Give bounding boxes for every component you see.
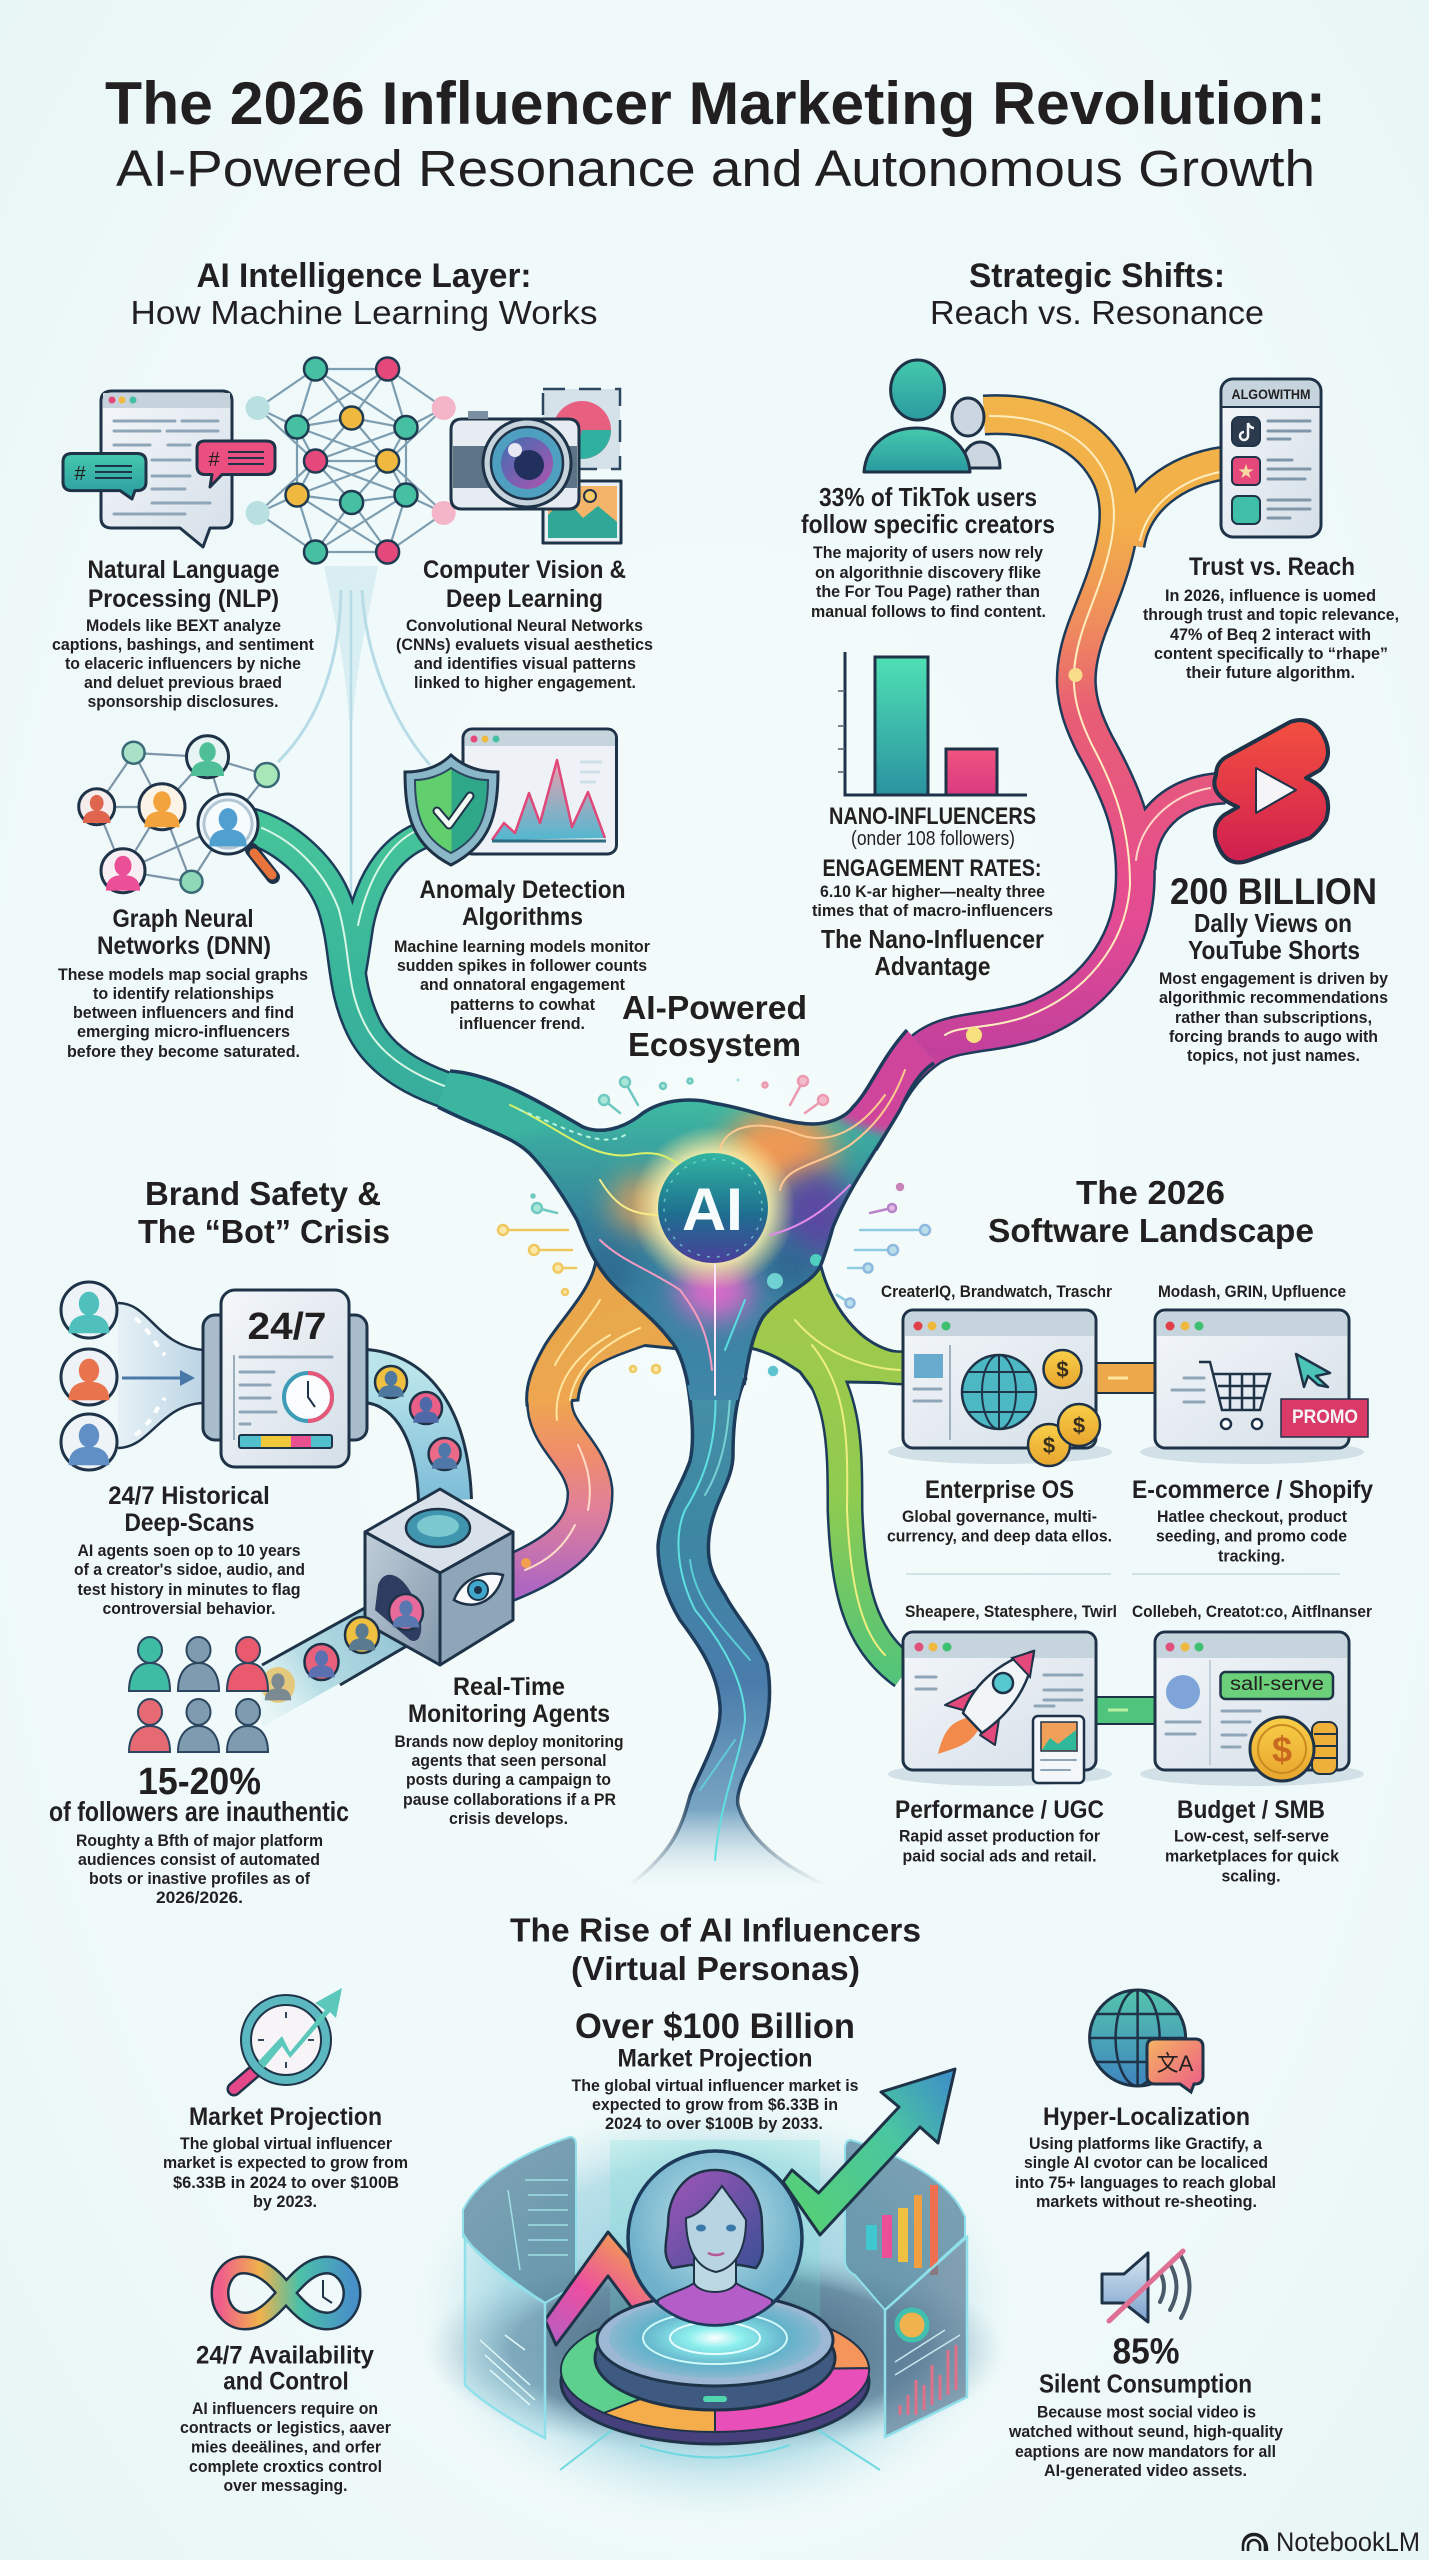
- text block: hyper-localization: [1015, 2103, 1276, 2211]
- tools list row 2: Sheapere, Statesphere, Twirl: [905, 1603, 1117, 1621]
- icon: algorithm phone: ★: [1238, 464, 1254, 481]
- text block: trust vs reach: [1143, 553, 1399, 682]
- heading: [138, 1175, 390, 1250]
- text block: youtube shorts: 200 BILLION: [1170, 871, 1377, 912]
- arrow: rising left: [545, 2232, 690, 2352]
- holographic side panels: [465, 2237, 545, 2438]
- tools list row 1: Modash, GRIN, Upfluence: [1158, 1283, 1346, 1301]
- text block: inauthentic followers: of followers are inauthentic: [49, 1796, 349, 1827]
- text block: nano-influencer: NANO-INFLUENCERS: [829, 803, 1036, 830]
- heading: [510, 1912, 921, 1987]
- text block: performance and budget: marketplaces for quick: [1165, 1846, 1340, 1866]
- arrow: streams into scanner: [118, 1303, 203, 1448]
- branch: strategic shifts tube: [860, 415, 1225, 1140]
- hologram illustration: [415, 2069, 1015, 2525]
- icon: inspection cube: [365, 1489, 513, 1665]
- virtual persona: [628, 2151, 802, 2330]
- text block: GNN: emerging micro-influencers: [77, 1022, 290, 1041]
- text block: trust vs reach: their future algorithm.: [1186, 663, 1355, 682]
- text block: GNN: before they become saturated.: [67, 1042, 300, 1061]
- text block: performance and budget: scaling.: [1222, 1866, 1280, 1886]
- text block: market projection: $6.33B in 2024 to over $100B: [173, 2173, 399, 2192]
- text block: GNN: Networks (DNN): [97, 932, 271, 960]
- icon: 24/7 scanner card: 24/7: [248, 1306, 326, 1348]
- text block: anomaly detection: and onnatoral engagement: [420, 975, 625, 994]
- text block: market projection headline: [572, 2007, 858, 2133]
- connector: orange: [1096, 1363, 1155, 1393]
- title: [105, 70, 1326, 197]
- heading: Strategic Shifts:: [969, 257, 1225, 295]
- text block: inauthentic followers: 2026/2026.: [156, 1888, 243, 1907]
- text block: market projection headline: The global virtual influencer market is: [572, 2076, 858, 2095]
- window: e-commerce: PROMO: [1292, 1407, 1358, 1428]
- text block: real-time monitoring: Real-Time: [453, 1673, 565, 1701]
- text block: real-time monitoring: posts during a campaign to: [406, 1770, 611, 1789]
- text block: real-time monitoring: pause collaborations if a PR: [403, 1790, 616, 1809]
- text block: inauthentic followers: [49, 1761, 349, 1907]
- text block: hyper-localization: single AI cvotor can be localiced: [1024, 2153, 1268, 2172]
- tools list row 2: [905, 1603, 1373, 1621]
- text block: nano-influencer: Advantage: [874, 951, 990, 981]
- text block: real-time monitoring: [394, 1673, 624, 1828]
- icon: shield and anomaly chart: [405, 729, 616, 865]
- text block: market projection headline: Over $100 Billion: [575, 2007, 855, 2046]
- text block: youtube shorts: [1159, 871, 1388, 1065]
- icon: audience crowd: [129, 1637, 268, 1752]
- text block: NLP: to elaceric influencers by niche: [65, 654, 301, 673]
- icon: infinity clock: [220, 2265, 352, 2321]
- text block: TikTok stat: follow specific creators: [801, 509, 1055, 539]
- text block: TikTok stat: manual follows to find content.: [811, 602, 1046, 621]
- heading: Reach vs. Resonance: [930, 294, 1264, 331]
- window: e-commerce: [1140, 1310, 1368, 1464]
- text block: availability: [180, 2342, 391, 2495]
- text block: silent consumption: [1008, 2330, 1284, 2480]
- AI badge: [658, 1153, 768, 1263]
- text block: anomaly detection: Algorithms: [462, 903, 583, 931]
- heading: AI-powered ecosystem: AI-Powered: [622, 989, 807, 1026]
- tools list row 1: CreaterIQ, Brandwatch, Traschr: [881, 1283, 1113, 1301]
- text block: youtube shorts: algorithmic recommendations: [1159, 988, 1388, 1007]
- heading: (Virtual Personas): [571, 1950, 860, 1987]
- AI badge: AI: [682, 1176, 743, 1243]
- heading: Brand Safety &: [145, 1175, 381, 1212]
- chart: nano-influencer bars: [838, 652, 1027, 795]
- text block: inauthentic followers: bots or inastive profiles as of: [89, 1869, 310, 1888]
- text block: GNN: [58, 905, 308, 1061]
- text block: silent consumption: 85%: [1112, 2330, 1180, 2372]
- text block: availability: AI influencers require on: [192, 2399, 378, 2418]
- text block: market projection: [163, 2103, 408, 2211]
- text block: anomaly detection: Machine learning models monitor: [394, 937, 650, 956]
- text block: performance and budget: [895, 1796, 1340, 1886]
- text block: availability: contracts or legistics, aaver: [180, 2418, 391, 2437]
- text block: TikTok stat: on algorithnie discovery flike: [815, 563, 1041, 582]
- icon: faces on belt: [261, 1594, 423, 1703]
- decorative nodes around hub: [498, 1076, 930, 1375]
- window: budget SMB: sall-serve: [1230, 1674, 1324, 1695]
- icon: algorithm phone: ALGOWITHM: [1232, 386, 1310, 402]
- text block: market projection: Market Projection: [189, 2103, 382, 2131]
- branch: AI intelligence layer tube: [250, 826, 500, 1105]
- window: enterprise OS: [888, 1310, 1112, 1466]
- central tail: [630, 1380, 825, 1885]
- window: enterprise OS: $: [1043, 1433, 1055, 1458]
- text block: inauthentic followers: Roughty a Bfth of major platform: [76, 1831, 323, 1850]
- text block: computer vision: and identifies visual patterns: [414, 654, 636, 673]
- text block: youtube shorts: YouTube Shorts: [1188, 935, 1360, 965]
- text block: computer vision: (CNNs) evaluets visual aesthetics: [396, 635, 653, 654]
- heading: [130, 257, 598, 331]
- text block: market projection headline: Market Projection: [618, 2044, 812, 2072]
- text block: enterprise and e-commerce: currency, and deep data ellos.: [887, 1526, 1112, 1546]
- branch: software landscape tube: [750, 1262, 905, 1672]
- text block: silent consumption: eaptions are now mandators for all: [1015, 2442, 1276, 2461]
- text block: anomaly detection: Anomaly Detection: [420, 876, 626, 904]
- text block: performance and budget: paid social ads and retail.: [902, 1846, 1096, 1866]
- heading: [930, 257, 1264, 331]
- tools list row 2: Collebeh, Creatot:co, Aitflnanser: [1132, 1603, 1373, 1621]
- text block: silent consumption: AI-generated video assets.: [1044, 2461, 1247, 2480]
- icon: youtube shorts: [1214, 720, 1328, 862]
- text block: nano-influencer: (onder 108 followers): [851, 828, 1015, 850]
- icon: followers: [864, 360, 1000, 472]
- icon: algorithm phone: [1221, 379, 1321, 537]
- heading: AI-powered ecosystem: [622, 989, 807, 1063]
- text block: TikTok stat: [801, 482, 1055, 621]
- text block: youtube shorts: Most engagement is driven by: [1159, 969, 1388, 988]
- panel: brand safety: [49, 1175, 624, 1907]
- text block: inauthentic followers: 15-20%: [138, 1761, 261, 1803]
- heading: The Rise of AI Influencers: [510, 1912, 921, 1948]
- text block: youtube shorts: rather than subscriptions,: [1175, 1008, 1372, 1027]
- text block: computer vision: Convolutional Neural Networks: [406, 616, 643, 635]
- text block: hyper-localization: Hyper-Localization: [1043, 2103, 1250, 2131]
- icon: document with hashtag bubbles: #: [208, 449, 220, 471]
- text block: trust vs reach: Trust vs. Reach: [1189, 553, 1355, 581]
- window: budget SMB: $: [1272, 1729, 1292, 1770]
- heading: [988, 1174, 1314, 1249]
- text block: deep-scans: [74, 1482, 305, 1618]
- text block: market projection: by 2023.: [253, 2192, 317, 2211]
- arrow: rising right: [783, 2069, 955, 2235]
- window: budget SMB: [1140, 1632, 1364, 1786]
- text block: NLP: [52, 556, 314, 711]
- text block: performance and budget: Low-cest, self-serve: [1174, 1826, 1329, 1846]
- text block: computer vision: linked to higher engagement.: [414, 673, 636, 692]
- icon: document with hashtag bubbles: [63, 391, 275, 547]
- text block: deep-scans: test history in minutes to flag: [78, 1580, 300, 1599]
- platform: [561, 2294, 869, 2444]
- text block: availability: complete croxtics control: [189, 2457, 382, 2476]
- text block: trust vs reach: 47% of Beq 2 interact with: [1170, 625, 1371, 644]
- text block: silent consumption: Silent Consumption: [1039, 2368, 1252, 2398]
- text block: enterprise and e-commerce: [887, 1476, 1373, 1566]
- icon: document with hashtag bubbles: #: [74, 463, 86, 485]
- icon: globe translation: [1090, 1990, 1203, 2092]
- text block: deep-scans: controversial behavior.: [102, 1599, 276, 1618]
- heading: The “Bot” Crisis: [138, 1213, 390, 1250]
- arrow: belt to cube: [366, 1366, 461, 1500]
- text block: enterprise and e-commerce: seeding, and promo code: [1156, 1526, 1347, 1546]
- panel: strategic shifts: [801, 257, 1399, 1065]
- text block: NLP: captions, bashings, and sentiment: [52, 635, 314, 654]
- text block: TikTok stat: The majority of users now rely: [813, 543, 1044, 562]
- text block: youtube shorts: forcing brands to augo with: [1169, 1027, 1378, 1046]
- text block: GNN: Graph Neural: [112, 905, 254, 933]
- text block: enterprise and e-commerce: tracking.: [1218, 1546, 1285, 1566]
- text block: deep-scans: of a creator's sidoe, audio, and: [74, 1560, 305, 1579]
- text block: GNN: These models map social graphs: [58, 965, 308, 984]
- light beam from neural network: [278, 566, 430, 925]
- text block: market projection headline: 2024 to over $100B by 2033.: [605, 2114, 823, 2133]
- window: enterprise OS: $: [1056, 1357, 1069, 1382]
- text block: silent consumption: watched without seund, high-quality: [1008, 2422, 1284, 2441]
- icon: market projection magnifier: [234, 1988, 342, 2089]
- text block: availability: and Control: [223, 2368, 349, 2396]
- title: AI-Powered Resonance and Autonomous Growth: [116, 140, 1315, 197]
- tools list row 1: [881, 1283, 1346, 1301]
- text block: trust vs reach: In 2026, influence is uomed: [1165, 586, 1376, 605]
- text block: NLP: Models like BEXT analyze: [86, 616, 281, 635]
- text block: nano-influencer: ENGAGEMENT RATES:: [822, 855, 1042, 882]
- text block: computer vision: Computer Vision &: [423, 556, 626, 584]
- text block: anomaly detection: patterns to cowhat: [450, 995, 595, 1014]
- text block: enterprise and e-commerce: Enterprise OS: [925, 1476, 1074, 1504]
- heading: The 2026: [1076, 1174, 1225, 1211]
- logo: NotebookLM: NotebookLM: [1276, 2527, 1420, 2557]
- text block: enterprise and e-commerce: E-commerce / Shopify: [1132, 1476, 1373, 1504]
- branch: brand safety tube: [505, 1260, 690, 1580]
- icon: camera: [451, 389, 621, 543]
- text block: NLP: and deluet previous braed: [84, 673, 282, 692]
- connector: green: [1096, 1697, 1155, 1724]
- text block: real-time monitoring: Brands now deploy monitoring: [394, 1732, 624, 1751]
- text block: youtube shorts: Dally Views on: [1194, 908, 1352, 938]
- panel: AI intelligence layer: [52, 257, 653, 1061]
- icon: muted speaker: [1102, 2251, 1190, 2322]
- heading: AI Intelligence Layer:: [196, 257, 532, 295]
- text block: computer vision: [396, 556, 653, 692]
- icon: globe translation: 文A: [1157, 2051, 1194, 2076]
- text block: nano-influencer: [812, 803, 1053, 981]
- text block: real-time monitoring: Monitoring Agents: [408, 1700, 610, 1728]
- heading: AI-powered ecosystem: Ecosystem: [628, 1026, 801, 1063]
- title: The 2026 Influencer Marketing Revolution:: [105, 70, 1326, 137]
- text block: inauthentic followers: audiences consist of automated: [78, 1850, 320, 1869]
- text block: enterprise and e-commerce: Hatlee checkout, product: [1157, 1507, 1347, 1526]
- text block: nano-influencer: The Nano-Influencer: [821, 924, 1044, 954]
- text block: trust vs reach: through trust and topic relevance,: [1143, 605, 1399, 624]
- text block: performance and budget: Rapid asset production for: [899, 1826, 1100, 1846]
- AI hub: [437, 1028, 935, 1400]
- panel: rise of AI influencers: [163, 1912, 1284, 2525]
- text block: nano-influencer: 6.10 K-ar higher—nealty three: [820, 882, 1045, 901]
- text block: deep-scans: 24/7 Historical: [108, 1482, 270, 1510]
- text block: anomaly detection: [394, 876, 650, 1033]
- text block: nano-influencer: times that of macro-influencers: [812, 901, 1053, 920]
- text block: TikTok stat: the For Tou Page) rather than: [816, 582, 1040, 601]
- text block: market projection: market is expected to grow from: [163, 2153, 408, 2172]
- text block: trust vs reach: content specifically to “rhape”: [1154, 644, 1388, 663]
- text block: computer vision: Deep Learning: [446, 585, 603, 613]
- text block: real-time monitoring: agents that seen personal: [412, 1751, 606, 1770]
- text block: hyper-localization: into 75+ languages to reach global: [1015, 2173, 1276, 2192]
- heading: How Machine Learning Works: [130, 294, 598, 331]
- text block: performance and budget: Budget / SMB: [1177, 1796, 1325, 1824]
- icon: neural network: [246, 358, 456, 564]
- text block: anomaly detection: influencer frend.: [459, 1014, 585, 1033]
- icon: audience portraits: [61, 1282, 117, 1470]
- text block: availability: mies deeälines, and orfer: [191, 2438, 381, 2456]
- text block: silent consumption: Because most social video is: [1037, 2402, 1256, 2422]
- text block: hyper-localization: markets without re-sheoting.: [1036, 2192, 1257, 2211]
- text block: enterprise and e-commerce: Global governance, multi-: [902, 1507, 1097, 1526]
- text block: NLP: sponsorship disclosures.: [88, 692, 278, 711]
- text block: availability: over messaging.: [224, 2476, 348, 2495]
- text block: TikTok stat: 33% of TikTok users: [819, 482, 1037, 512]
- text block: GNN: between influencers and find: [73, 1003, 294, 1022]
- text block: youtube shorts: topics, not just names.: [1187, 1046, 1360, 1065]
- text block: availability: 24/7 Availability: [196, 2342, 374, 2370]
- panel: software landscape: [881, 1174, 1373, 1886]
- text block: real-time monitoring: crisis develops.: [449, 1809, 568, 1828]
- text block: deep-scans: Deep-Scans: [124, 1509, 254, 1537]
- text block: NLP: Processing (NLP): [88, 585, 279, 613]
- text block: market projection headline: expected to grow from $6.33B in: [592, 2095, 838, 2114]
- heading: Software Landscape: [988, 1212, 1314, 1249]
- icon: 24/7 scanner card: [203, 1290, 367, 1467]
- text block: hyper-localization: Using platforms like Gractify, a: [1029, 2134, 1263, 2153]
- arrow: belt from cube to crowd: [260, 1583, 429, 1727]
- text block: performance and budget: Performance / UGC: [895, 1796, 1104, 1824]
- window: enterprise OS: $: [1073, 1413, 1085, 1438]
- text block: GNN: to identify relationships: [93, 984, 274, 1003]
- text block: anomaly detection: sudden spikes in follower counts: [397, 956, 647, 975]
- text block: NLP: Natural Language: [88, 556, 280, 584]
- window: performance UGC: [888, 1632, 1112, 1786]
- text block: market projection: The global virtual influencer: [180, 2134, 392, 2153]
- icon: graph neural network: [79, 736, 279, 893]
- text block: deep-scans: AI agents soen op to 10 years: [78, 1541, 300, 1560]
